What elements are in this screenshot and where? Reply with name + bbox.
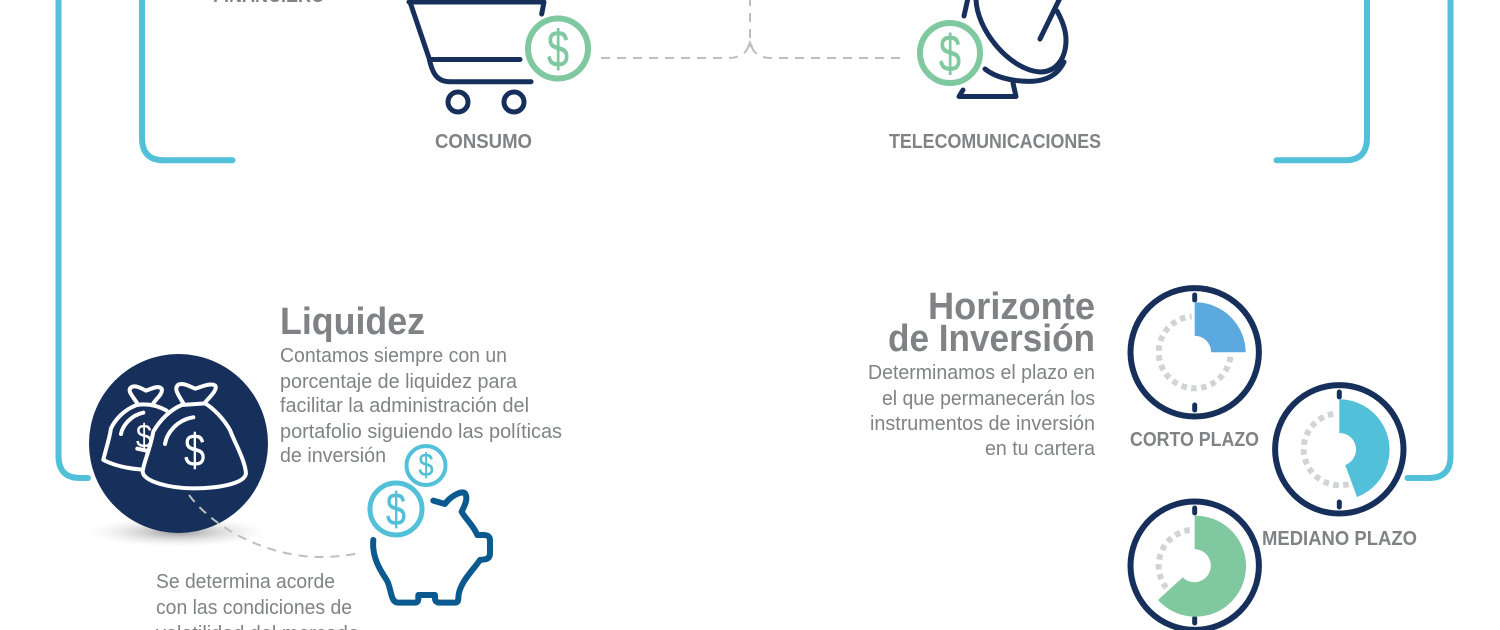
connector: dashed curve from badge to piggy bank (189, 495, 360, 557)
cart body (409, 2, 544, 112)
coin (920, 23, 980, 83)
text block: horizonte description: el que permanecerán los (882, 388, 1095, 410)
text block: horizonte description: instrumentos de inversión (870, 413, 1095, 435)
label: consumo: CONSUMO (435, 131, 532, 153)
icon: shopping cart with coin (409, 2, 588, 112)
text block: liquidez description: Contamos siempre con un (280, 345, 507, 367)
text block: horizonte description: en tu cartera (985, 438, 1096, 460)
dish (959, 0, 1066, 96)
text block: liquidez description: portafolio siguiendo las políticas (280, 421, 562, 443)
icon: money bags badge (88, 354, 268, 547)
badge circle (89, 354, 268, 533)
clock: mediano plazo (1275, 385, 1404, 514)
badge shadow (88, 517, 268, 547)
large coin: $ (386, 483, 406, 535)
text block: liquidez description (280, 345, 562, 467)
bags: $ (184, 424, 205, 476)
text block: liquidez description: facilitar la administración del (280, 395, 529, 417)
small coin (406, 446, 446, 485)
coin: $ (547, 20, 569, 78)
coin (528, 18, 588, 78)
heading: horizonte de inversion: Horizonte (928, 286, 1095, 328)
inner frame: right bracket (1276, 0, 1367, 160)
small coin: $ (418, 447, 434, 483)
label: mediano plazo: MEDIANO PLAZO (1262, 528, 1417, 550)
text block: horizonte description (868, 362, 1096, 460)
icon: satellite dish with coin (920, 0, 1066, 96)
text block: liquidez description: porcentaje de liquidez para (280, 371, 518, 393)
bags: $ (136, 418, 152, 455)
pig body (373, 492, 490, 603)
text block: market volatility note (156, 571, 359, 630)
label: telecomunicaciones: TELECOMUNICACIONES (889, 131, 1101, 153)
label: corto plazo: CORTO PLAZO (1130, 429, 1259, 451)
heading: horizonte de inversion: de Inversión (888, 318, 1095, 360)
bags (103, 384, 246, 488)
connector: dashed lines to sectors (601, 0, 900, 58)
icon: piggy bank with coins (370, 446, 490, 603)
coin: $ (939, 25, 961, 83)
clock: corto plazo (1130, 288, 1259, 416)
outer frame: right bracket (1408, 0, 1450, 478)
clock: largo plazo (1130, 502, 1259, 630)
inner frame: left bracket (142, 0, 232, 160)
heading: horizonte de inversion (888, 286, 1095, 360)
text block: horizonte description: Determinamos el plazo en (868, 362, 1095, 384)
text block: liquidez description: de inversión (280, 445, 386, 467)
large coin (370, 483, 422, 535)
outer frame: left bracket (58, 0, 88, 478)
text block: market volatility note: Se determina acorde (156, 571, 335, 593)
text block: market volatility note: con las condiciones de (156, 597, 352, 619)
heading: liquidez: Liquidez (280, 301, 425, 343)
